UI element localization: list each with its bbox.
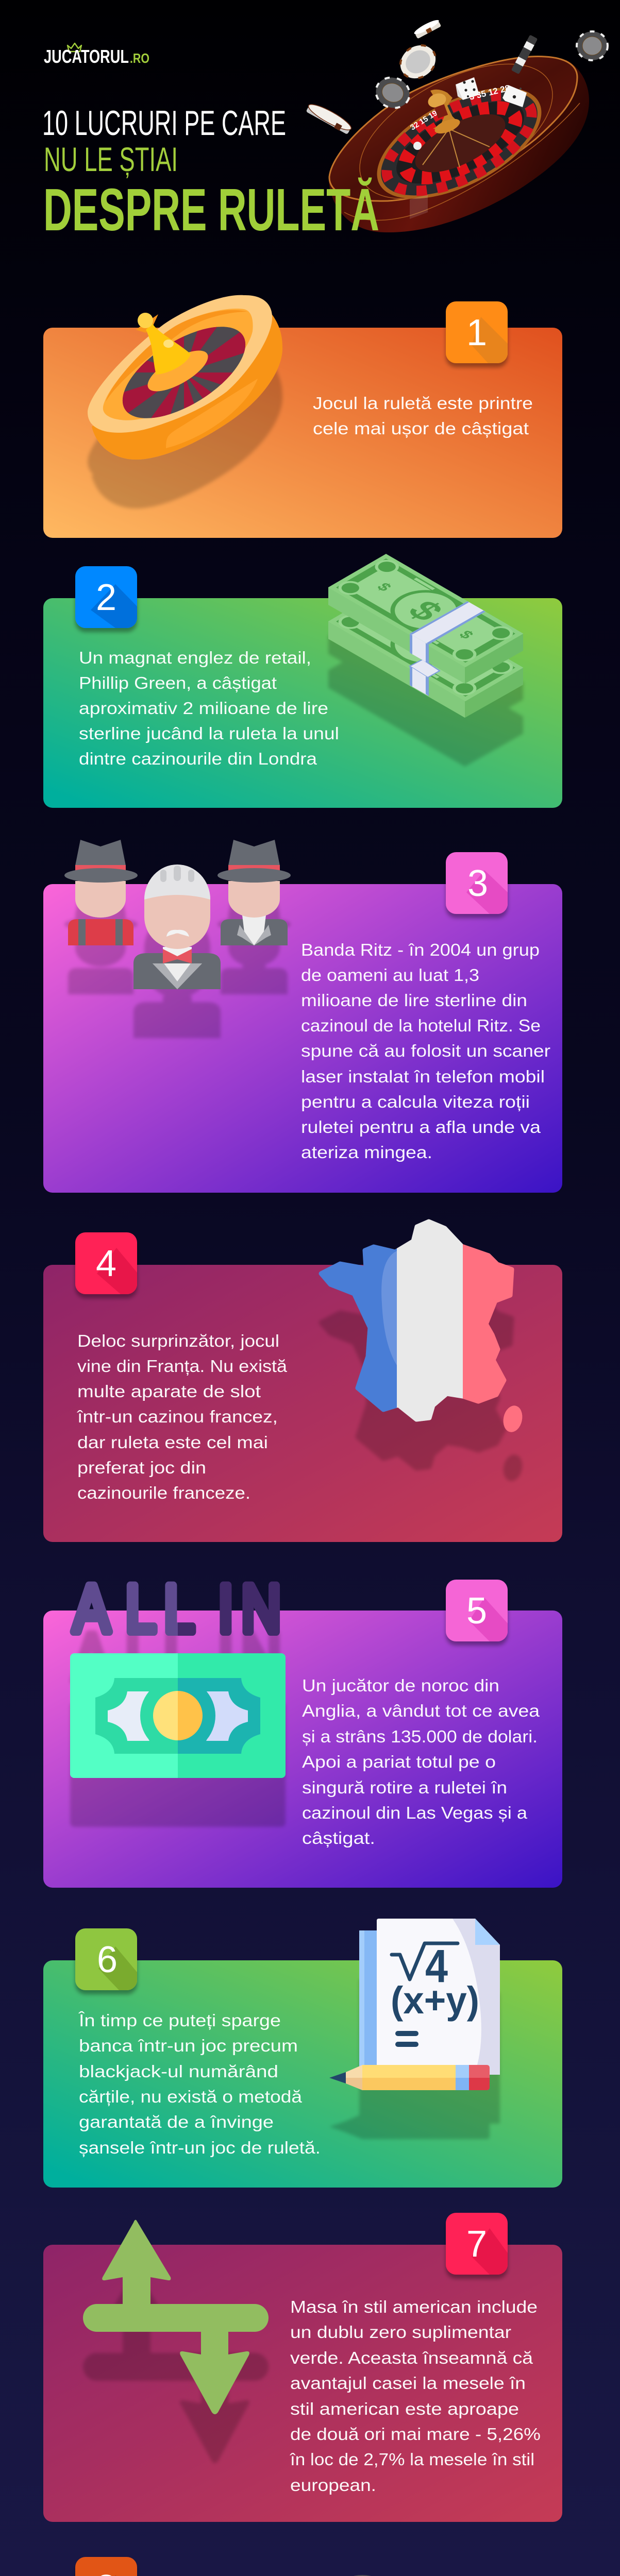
panel 3: icon three men	[64, 840, 291, 989]
panel 4: text: într-un cazinou francez,	[77, 1407, 278, 1426]
title: DESPRE RULETĂ	[43, 176, 379, 243]
right man	[217, 840, 291, 945]
panel 2: badge: 2	[96, 577, 116, 618]
panel 4: text: Deloc surprinzător, jocul	[77, 1331, 279, 1350]
panel 7: badge: 7	[466, 2224, 487, 2265]
panel 1: badge	[446, 301, 508, 363]
panel 7: text: european.	[290, 2476, 376, 2495]
panel 5: icon all in banknote	[70, 1571, 286, 1778]
pencil	[329, 2072, 346, 2083]
panel 3: background card	[43, 884, 562, 1193]
panel 3: text: de oameni au luat 1,3	[301, 965, 479, 985]
panel 4: text	[77, 1331, 288, 1502]
panel 5: background card	[43, 1611, 562, 1888]
panel 7: text: în loc de 2,7% la mesele în stil	[290, 2450, 534, 2469]
panel 6: text: În timp ce puteți sparge	[78, 2011, 281, 2030]
logo: JUCATORUL	[44, 46, 129, 67]
panel 6: badge	[75, 1928, 137, 1990]
panel 7: text	[290, 2297, 541, 2495]
panel 2: text: Un magnat englez de retail,	[79, 648, 311, 667]
panel 2: text: aproximativ 2 milioane de lire	[79, 699, 328, 718]
chip grey right	[577, 31, 608, 60]
percent bubble	[323, 2575, 407, 2576]
panel 4: icon map of France	[321, 1222, 525, 1434]
gold ring	[360, 65, 558, 222]
panel 6: icon math notebook and pencil	[329, 1919, 500, 2090]
title: NU LE ȘTIAI	[44, 140, 178, 178]
panel 4: text: vine din Franța. Nu există	[77, 1357, 288, 1376]
panel 6: text: cărțile, nu există o metodă	[79, 2087, 303, 2106]
panel 1: text: cele mai ușor de câștigat	[313, 419, 529, 438]
panel 5: text: cazinoul din Las Vegas și a	[302, 1803, 528, 1822]
panel 3: text: ateriza mingea.	[301, 1143, 432, 1162]
panel 1: background card	[43, 328, 562, 538]
title	[42, 104, 379, 243]
panel 5: text: Anglia, a vândut tot ce avea	[302, 1701, 540, 1720]
illustration: roulette wheel with chips and dice: 3 35 12 28	[468, 83, 511, 102]
ball	[413, 142, 422, 150]
panel 4: background card	[43, 1265, 562, 1542]
panel 4: text: cazinourile franceze.	[77, 1483, 250, 1502]
inner cone	[407, 103, 514, 184]
panel 3: text: Banda Ritz - în 2004 un grup	[301, 940, 540, 959]
centre man	[133, 865, 221, 989]
wheel rim	[329, 57, 577, 201]
panel 7: text: de două ori mai mare - 5,26%	[290, 2425, 541, 2444]
dice right	[502, 85, 527, 107]
panel 6: icon math notebook and pencil: (x+y)	[391, 1979, 479, 2022]
panel 3: text	[301, 940, 550, 1162]
panel 4: badge: 4	[96, 1243, 116, 1284]
panel 5: badge: 5	[466, 1590, 487, 1632]
title: 10 LUCRURI PE CARE	[42, 104, 286, 143]
panel 6: badge: 6	[97, 1939, 118, 1980]
panel 5: badge	[446, 1580, 508, 1641]
panel 3: badge: 3	[467, 863, 488, 904]
panel 3: text: spune că au folosit un scaner	[301, 1041, 550, 1060]
illustration: roulette wheel with chips and dice	[305, 18, 608, 232]
panel 8: icon percent, chart arrow and coins	[315, 2575, 517, 2576]
panel 6: icon math notebook and pencil: 4	[425, 1941, 448, 1992]
icon: crown	[68, 43, 81, 52]
panel 2: text	[79, 648, 339, 768]
panel 7: text: un dublu zero suplimentar	[290, 2323, 511, 2342]
panel 6: text: banca într-un joc precum	[79, 2036, 298, 2055]
panel 3: text: ruletei pentru a afla unde va	[301, 1117, 541, 1137]
panel 1: text: Jocul la ruletă este printre	[313, 394, 533, 413]
panel 6: text	[78, 2011, 321, 2157]
panel 4: text: dar ruleta este cel mai	[77, 1433, 268, 1452]
panel 5: text	[302, 1676, 540, 1848]
panel 7: badge	[446, 2213, 508, 2275]
wheel reflections	[410, 195, 428, 219]
number track	[373, 76, 546, 211]
panel 6: text: garantată de a învinge	[79, 2112, 274, 2131]
panel 2: icon stacks of money	[328, 554, 523, 718]
panel 5: text: câștigat.	[302, 1828, 375, 1848]
panel 4: text: preferat joc din	[77, 1458, 206, 1477]
panel 1: text	[313, 394, 533, 438]
panel 7: text: stil american este aproape	[290, 2399, 519, 2418]
inner pockets	[384, 85, 536, 200]
panel 3: text: milioane de lire sterline din	[301, 991, 527, 1010]
chip flat left	[305, 100, 354, 135]
wheel body	[329, 60, 589, 232]
panel 5: text: Apoi a pariat totul pe o	[302, 1752, 496, 1771]
hub turret	[430, 90, 460, 130]
panel 7: background card	[43, 2245, 562, 2522]
panel 6: background card	[43, 1960, 562, 2188]
illustration: roulette wheel with chips and dice: 32 15 19 4	[409, 105, 445, 132]
panel 4: text: multe aparate de slot	[77, 1382, 261, 1401]
panel 3: text: pentru a calcula viteza roții	[301, 1092, 530, 1111]
panel 7: text: verde. Aceasta înseamnă că	[290, 2348, 533, 2367]
panel 2: text: dintre cazinourile din Londra	[79, 749, 317, 768]
chip grey	[372, 73, 414, 113]
panel 6: text: blackjack-ul numărând	[79, 2062, 278, 2081]
panel 7: icon up and down arrows	[83, 2220, 269, 2414]
panel 3: text: laser instalat în telefon mobil	[301, 1067, 545, 1086]
chip edge	[511, 35, 538, 74]
panel 2: badge	[75, 566, 137, 628]
panel 2: text: sterline jucând la ruleta la unul	[79, 724, 339, 743]
panel 5: icon all in banknote: ALLIN	[73, 1571, 281, 1646]
panel 4: badge	[75, 1232, 137, 1294]
panel 2: text: Phillip Green, a câștigat	[79, 673, 277, 692]
panel 1: badge: 1	[466, 312, 487, 353]
panel 3: badge	[446, 852, 508, 914]
panel 3: text: cazinoul de la hotelul Ritz. Se	[301, 1016, 541, 1035]
panel 7: text: Masa în stil american include	[290, 2297, 538, 2316]
left man	[64, 840, 138, 945]
panel 5: text: Un jucător de noroc din	[302, 1676, 499, 1695]
panel 5: text: și a strâns 135.000 de dolari.	[302, 1727, 538, 1746]
panel 7: text: avantajul casei la mesele în	[290, 2374, 526, 2393]
panel 8: badge	[75, 2557, 137, 2576]
dice left	[456, 77, 479, 100]
chip white	[394, 39, 442, 85]
chip small top	[413, 18, 442, 39]
logo: .RO	[130, 50, 149, 66]
panel 6: text: șansele într-un joc de ruletă.	[79, 2138, 321, 2157]
panel 1: icon roulette	[86, 295, 284, 510]
panel 5: text: singură rotire a ruletei în	[302, 1778, 507, 1797]
panel 2: background card	[43, 598, 562, 808]
